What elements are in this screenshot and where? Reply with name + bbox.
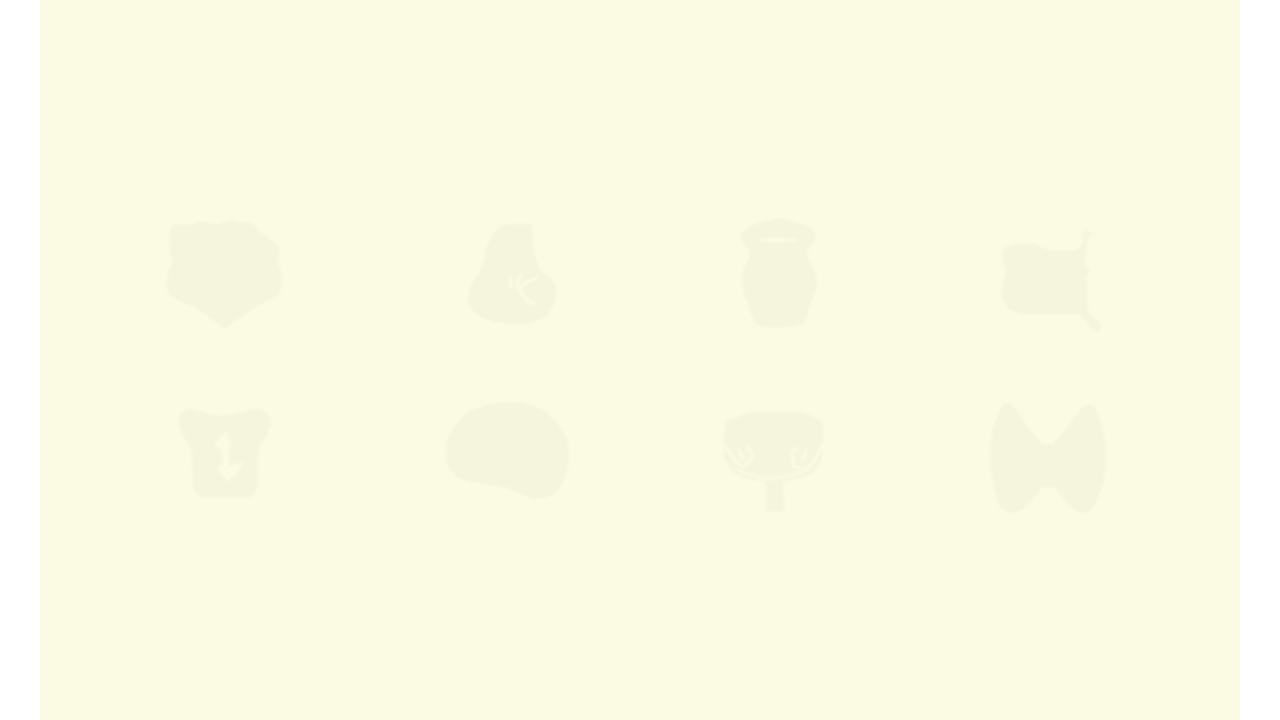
highlight: left inner branch (726, 446, 753, 467)
icon: kidney or brain silhouette (446, 402, 569, 500)
icon: bladder silhouette (178, 409, 271, 498)
highlight: vase rim opening (758, 238, 798, 242)
icon grid: organ silhouettes (167, 218, 1106, 513)
icon: vase silhouette (741, 218, 817, 327)
highlight: base curve (738, 470, 808, 480)
icon: stomach shield silhouette (167, 221, 282, 329)
icon: organ with vessels silhouette (1002, 226, 1102, 332)
highlight: inner folds (510, 274, 538, 304)
icon: thyroid butterfly silhouette (990, 403, 1106, 513)
highlight: right inner branch (792, 446, 822, 468)
icon: prostate or uterus silhouette (724, 411, 823, 511)
icon: curled organ silhouette (468, 224, 556, 324)
highlight: inner bolt mark (215, 431, 243, 482)
